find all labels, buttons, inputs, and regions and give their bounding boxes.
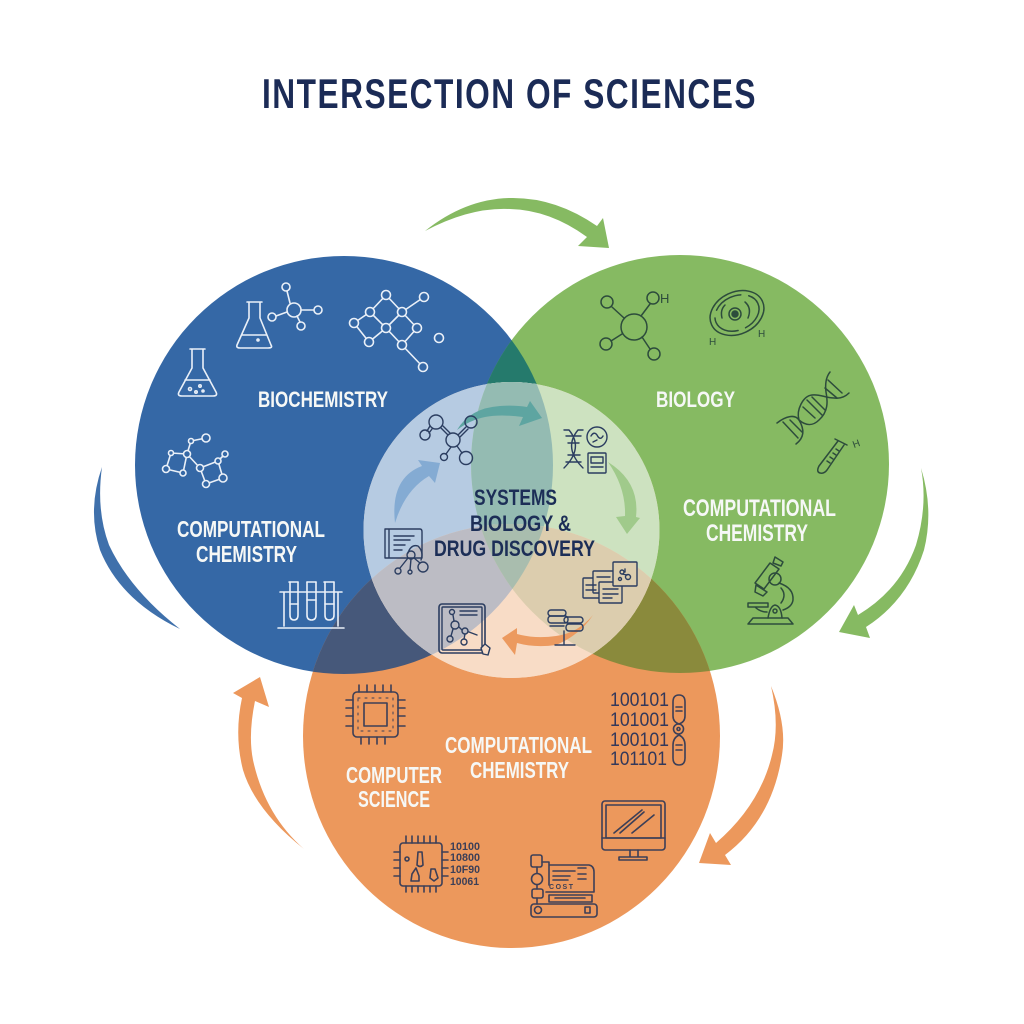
circle: biology xyxy=(471,255,889,673)
icon: chip with code xyxy=(394,836,480,892)
label: systems biology and drug discovery: BIOLOGY & xyxy=(470,511,571,536)
overlap: blue and green xyxy=(487,340,537,384)
panel: venn circles xyxy=(135,255,889,948)
icon: binary with chromosome: 101101 xyxy=(610,749,667,770)
label: biology: BIOLOGY xyxy=(656,387,735,412)
arrow: inner teal xyxy=(457,401,542,430)
icon: test tube rack xyxy=(278,582,344,628)
title: INTERSECTION OF SCIENCES xyxy=(262,70,757,117)
icon: molecule oh xyxy=(600,291,669,360)
icon: document with molecule xyxy=(385,529,428,574)
icon: cell xyxy=(703,282,771,348)
label: computational chemistry blue: CHEMISTRY xyxy=(196,541,297,567)
overlap: green and orange xyxy=(592,579,710,673)
label: computational chemistry blue xyxy=(177,516,325,567)
icon: flask xyxy=(178,349,217,396)
label: computational chemistry green xyxy=(683,495,836,547)
icon: document flowchart: COST xyxy=(549,884,574,891)
label: systems biology and drug discovery: DRUG DISCOVERY xyxy=(434,536,595,561)
icon: binary with chromosome: 100101 xyxy=(610,730,669,751)
icon: stacked documents xyxy=(583,562,637,603)
icon: monitor xyxy=(602,801,665,860)
icon: cell: H xyxy=(758,329,765,340)
label: computer science: SCIENCE xyxy=(358,786,430,812)
icon: ring molecule xyxy=(162,434,228,488)
icon: cpu chip xyxy=(346,685,405,744)
circle: computer science xyxy=(303,524,720,948)
arrow: inner orange xyxy=(502,615,593,655)
arrow: top green xyxy=(425,198,609,248)
label: computer science: COMPUTER xyxy=(346,762,442,788)
icon: binary with chromosome: 100101 xyxy=(610,690,669,711)
label: systems biology and drug discovery xyxy=(434,485,595,561)
icon: chip with code: 10800 xyxy=(450,852,480,864)
label: computational chemistry green: CHEMISTRY xyxy=(706,520,808,547)
label: computational chemistry orange xyxy=(445,732,592,783)
label: computational chemistry orange: COMPUTATIONAL xyxy=(445,732,592,758)
icon: flask with molecule xyxy=(237,283,322,348)
arrow: inner green xyxy=(608,462,640,534)
panel: central circle xyxy=(364,382,660,678)
icon: binary with chromosome: 101001 xyxy=(610,710,669,731)
icon: central molecule xyxy=(420,415,477,464)
icon: molecule oh: H xyxy=(660,291,669,306)
arrow: left orange xyxy=(233,677,304,849)
arrow: right green xyxy=(839,468,928,638)
icon: molecule network xyxy=(350,290,444,372)
icon: document flowchart xyxy=(531,855,597,917)
icon: test tube xyxy=(818,438,862,473)
icon: chip with code: 10100 xyxy=(450,841,480,853)
icon: microscope xyxy=(748,557,793,624)
label: computer science xyxy=(346,762,442,812)
icon: binary with chromosome xyxy=(610,690,685,770)
label: computational chemistry blue: COMPUTATIONAL xyxy=(177,516,325,542)
icon: tablet with molecule xyxy=(439,604,490,655)
overlap: blue and orange xyxy=(312,578,432,674)
icon: dna and device xyxy=(564,427,607,473)
arrow: inner blue xyxy=(394,460,440,523)
label: systems biology and drug discovery: SYSTEMS xyxy=(474,485,557,510)
icon: chip with code: 10F90 xyxy=(450,864,480,876)
arrow: right orange xyxy=(699,686,783,865)
icon: server tree xyxy=(548,610,583,645)
circle: biochemistry xyxy=(135,256,553,674)
icon: cell: H xyxy=(709,337,716,348)
label: biochemistry: BIOCHEMISTRY xyxy=(258,387,388,412)
icon: chip with code: 10061 xyxy=(450,876,479,888)
label: computational chemistry green: COMPUTATIONAL xyxy=(683,495,836,522)
icon: dna helix xyxy=(777,372,849,444)
icon: test tube: H xyxy=(851,438,862,451)
arrow: left blue xyxy=(94,467,180,629)
label: computational chemistry orange: CHEMISTRY xyxy=(470,757,569,783)
